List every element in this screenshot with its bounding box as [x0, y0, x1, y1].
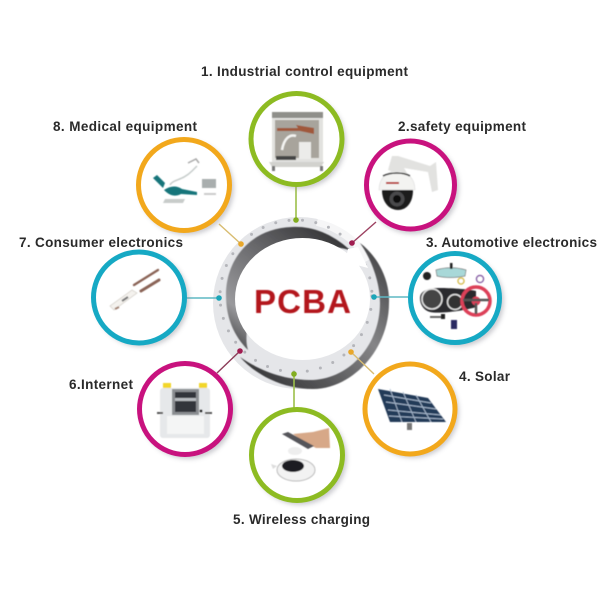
central PCBA ring [213, 217, 389, 389]
icon: solar panel [378, 389, 446, 430]
circle 4: solar [365, 364, 459, 458]
icon: hair curler [110, 270, 159, 310]
connector: solar [348, 349, 374, 374]
label 1: 1. Industrial control equipment [201, 64, 408, 79]
label 4: 4. Solar [459, 369, 511, 384]
circle 5: wireless charging [252, 410, 347, 505]
connector: wireless charging [291, 371, 297, 409]
circle 3: automotive electronics [410, 254, 504, 347]
label 3: 3. Automotive electronics [426, 235, 597, 250]
circle 2: safety equipment [366, 141, 459, 234]
icon: control cabinet [269, 112, 324, 171]
label 7: 7. Consumer electronics [19, 235, 183, 250]
connector: consumer electronics [187, 295, 222, 301]
label 2: 2.safety equipment [398, 119, 526, 134]
connector: internet [217, 348, 243, 373]
circle 7: consumer electronics [94, 252, 189, 347]
icon: smart meter [157, 383, 212, 438]
label 8: 8. Medical equipment [53, 119, 198, 134]
PCBA title: PCBA [254, 283, 351, 320]
circle 1: industrial control equipment [251, 94, 346, 189]
connector: industrial control [293, 186, 299, 223]
connector: automotive electronics [371, 294, 408, 300]
icon: dome camera [379, 156, 438, 210]
icon: dental chair [153, 159, 216, 203]
connector: medical equipment [219, 224, 244, 247]
circle 8: medical equipment [138, 140, 234, 235]
circle 6: internet [140, 364, 235, 459]
label 5: 5. Wireless charging [233, 512, 370, 527]
connector: safety equipment [349, 222, 376, 246]
icon: car dashboard [420, 263, 490, 329]
icon: phone and charger [271, 428, 330, 481]
label 6: 6.Internet [69, 377, 134, 392]
